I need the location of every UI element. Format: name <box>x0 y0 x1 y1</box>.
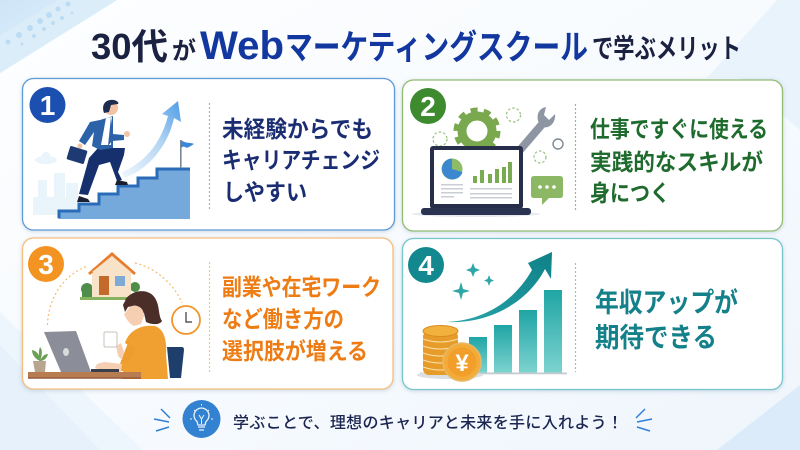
badge 1 <box>30 87 66 123</box>
badge 3 <box>28 246 64 282</box>
icon: right rays <box>636 409 652 431</box>
illustration: city background <box>33 152 78 215</box>
illustration: flag <box>180 140 194 168</box>
icon: light bulb <box>182 400 220 438</box>
text block 3: 副業や在宅ワーク <box>222 274 381 300</box>
panel: card 4 <box>402 238 782 390</box>
illustration: chart baseline <box>420 372 567 374</box>
title: が <box>172 37 196 65</box>
badge 3: 3 <box>38 249 54 280</box>
illustration: desk <box>28 372 141 379</box>
text block 2: 身につく <box>590 180 670 206</box>
divider 2 <box>574 104 576 212</box>
icon: left rays <box>154 409 170 431</box>
title: 30代 <box>91 26 168 67</box>
title: Web <box>200 24 284 68</box>
illustration: small circles <box>433 108 563 163</box>
illustration: bar chart <box>469 290 562 373</box>
illustration: stairs <box>58 168 190 219</box>
text block 1: しやすい <box>223 179 307 205</box>
illustration: house <box>80 252 140 300</box>
divider 1 <box>208 103 210 211</box>
badge 2 <box>410 88 446 124</box>
badge 4 <box>408 247 444 283</box>
text block 1: 未経験からでも <box>222 116 373 142</box>
text block 4: 期待できる <box>595 323 717 353</box>
text block 3 <box>222 274 381 364</box>
illustration: sparkles <box>452 263 494 300</box>
illustration: coffee cup <box>104 332 117 347</box>
illustration: rising arrow <box>122 101 181 178</box>
footer message <box>154 400 652 438</box>
illustration: yen coins: ¥ <box>455 350 469 377</box>
title: マーケティングスクール <box>285 29 588 67</box>
illustration: speech bubble <box>531 176 563 205</box>
illustration: businessman <box>66 100 130 202</box>
text block 1 <box>222 116 380 205</box>
illustration: growth arrow <box>447 252 552 322</box>
badge 2: 2 <box>420 91 436 122</box>
title <box>91 24 741 68</box>
text block 2 <box>590 116 768 206</box>
illustration: clock <box>172 306 200 334</box>
badge 4: 4 <box>418 250 434 281</box>
divider 3 <box>208 262 210 372</box>
panel: card 3 <box>22 238 393 389</box>
text block 3: など働き方の <box>222 306 344 332</box>
text block 4 <box>595 287 738 353</box>
text block 3: 選択肢が増える <box>222 338 368 364</box>
text block 1: キャリアチェンジ <box>222 147 380 173</box>
illustration: woman working <box>95 291 168 379</box>
text block 2: 仕事ですぐに使える <box>590 116 768 142</box>
text block 2: 実践的なスキルが <box>590 149 763 175</box>
title: で学ぶメリット <box>592 34 741 64</box>
badge 1: 1 <box>40 90 55 121</box>
illustration: yen coins <box>417 326 483 381</box>
panel: card 1 <box>22 78 394 230</box>
illustration: laptop <box>44 331 119 372</box>
panel: card 2 <box>402 80 782 231</box>
text block 4: 年収アップが <box>595 287 738 318</box>
illustration: dashed arc <box>48 263 182 325</box>
illustration: gear <box>456 110 498 152</box>
footer text: 学ぶことで、理想のキャリアと未来を手に入れよう！ <box>233 414 623 432</box>
illustration: plant <box>32 347 48 372</box>
illustration: chair <box>167 347 184 378</box>
illustration: laptop <box>412 146 540 217</box>
illustration: wrench <box>520 107 555 150</box>
divider 4 <box>574 263 576 372</box>
